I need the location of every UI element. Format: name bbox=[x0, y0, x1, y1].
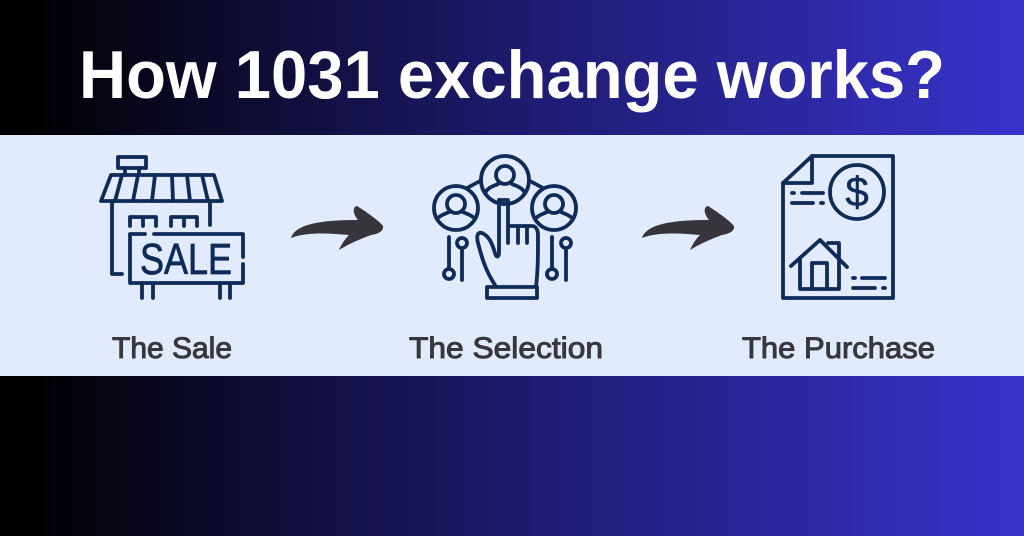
arrow: sale to selection bbox=[291, 206, 383, 250]
icon: purchase document: $ bbox=[845, 168, 869, 215]
icon: selection hand and people bbox=[434, 156, 576, 298]
icon: sale shop bbox=[101, 157, 243, 298]
label: the selection: The Selection bbox=[409, 332, 603, 365]
panel: steps band bbox=[0, 135, 1024, 376]
icon: purchase document bbox=[783, 156, 893, 298]
label: the purchase: The Purchase bbox=[742, 332, 935, 365]
arrow: selection to purchase bbox=[642, 206, 734, 250]
title: How 1031 exchange works? bbox=[79, 37, 945, 113]
label: the sale: The Sale bbox=[112, 332, 232, 365]
icon: sale shop: SALE bbox=[140, 235, 232, 284]
